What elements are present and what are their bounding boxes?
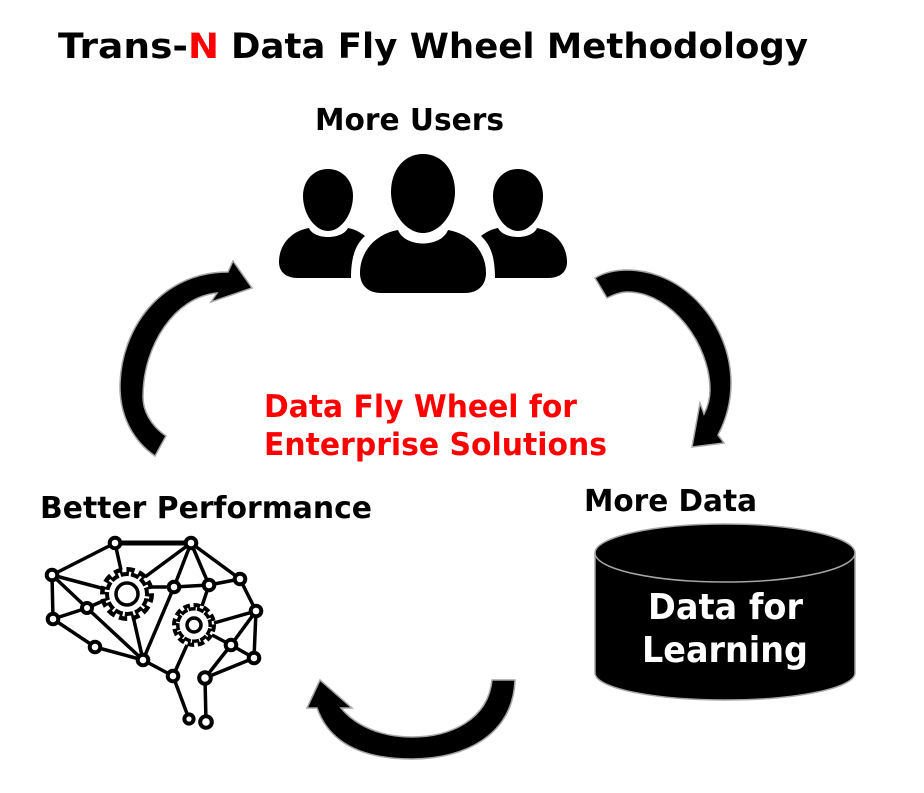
- arrow: data to performance: [307, 680, 515, 759]
- arrow: users to data: [595, 270, 731, 447]
- database cylinder: [595, 524, 855, 700]
- title: Trans-: [58, 27, 188, 67]
- label: More Users: More Users: [315, 103, 504, 138]
- icon: group of users: [279, 154, 567, 293]
- icon: brain network with gears: [47, 538, 261, 728]
- gear: small: [174, 605, 214, 645]
- label: More Data: More Data: [584, 484, 757, 519]
- database cylinder: Learning: [642, 630, 808, 671]
- gear: large: [103, 570, 151, 618]
- network nodes: [47, 538, 261, 728]
- center caption: Enterprise Solutions: [264, 427, 607, 463]
- title: Data Fly Wheel Methodology: [231, 27, 808, 67]
- database cylinder: Data for: [648, 587, 803, 628]
- center caption: Data Fly Wheel for: [264, 389, 577, 425]
- arrow: performance to users: [120, 261, 252, 456]
- title: N: [188, 27, 219, 67]
- center caption: [264, 389, 607, 463]
- label: Better Performance: Better Performance: [40, 491, 372, 526]
